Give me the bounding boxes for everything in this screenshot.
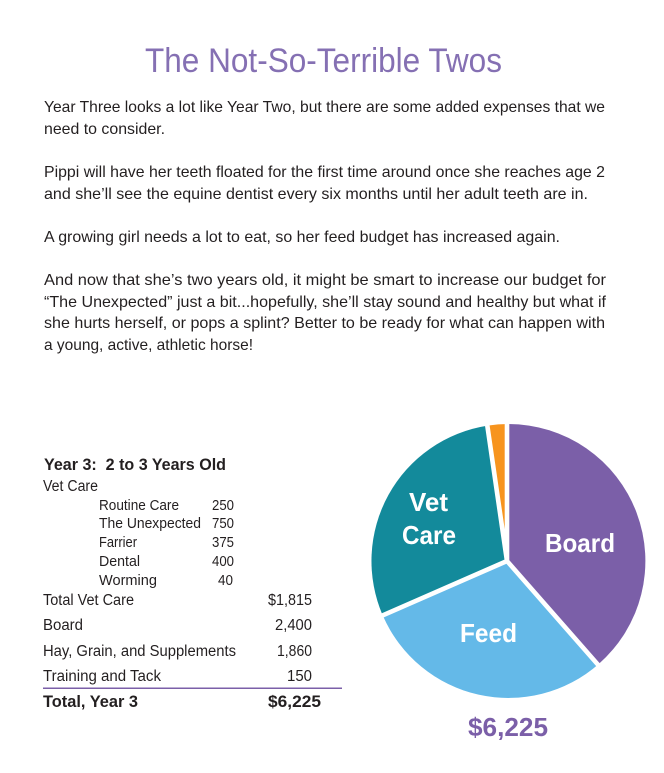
vet care line items (99, 498, 234, 589)
slice: feed (383, 561, 599, 698)
table heading: Year 3: 2 to 3 Years Old (44, 455, 226, 474)
vet care line items: Routine Care (99, 498, 179, 514)
pie chart (371, 420, 645, 698)
pie total: $6,225 (468, 712, 548, 742)
vet care line items: Dental (99, 554, 140, 570)
total row (43, 692, 321, 711)
total row: Total, Year 3 (43, 692, 138, 711)
training and tack row: Training and Tack (43, 668, 161, 685)
label: vet care: Vet (409, 487, 448, 517)
vet care line items: 375 (212, 535, 234, 551)
text block: introduction: Year Three looks a lot like Year Two, but there are some added expenses that we (44, 99, 605, 116)
vet care line items: 750 (212, 516, 234, 532)
vet care line items: Worming (99, 573, 157, 589)
vet care line items: 400 (212, 554, 234, 570)
vet care line items: The Unexpected (99, 516, 201, 532)
vet care line items: 250 (212, 498, 234, 514)
slice: vet care (371, 426, 508, 616)
text block: the unexpected: “The Unexpected” just a bit...hopefully, she’ll stay sound and healthy but what if (44, 294, 607, 311)
board row: Board (43, 617, 83, 634)
label: vet care (402, 487, 456, 550)
total vet care row: $1,815 (268, 592, 312, 609)
total vet care row (43, 592, 312, 609)
text block: the unexpected: a young, active, athletic horse! (44, 337, 253, 354)
text block: introduction (44, 99, 605, 138)
text block: teeth floating (44, 164, 605, 203)
text block: introduction: need to consider. (44, 121, 165, 138)
board row: 2,400 (275, 617, 312, 634)
label: vet care: Care (402, 520, 456, 550)
training and tack row: 150 (287, 668, 312, 685)
text block: the unexpected: And now that she’s two years old, it might be smart to increase our budget for (44, 272, 607, 289)
vet care line items: Farrier (99, 535, 137, 551)
hay, grain and supplements row: 1,860 (277, 643, 312, 660)
vet care subheading: Vet Care (43, 478, 98, 495)
vet care line items: 40 (218, 573, 233, 589)
board row (43, 617, 312, 634)
label: feed: Feed (460, 618, 517, 648)
hay, grain and supplements row: Hay, Grain, and Supplements (43, 643, 236, 660)
text block: teeth floating: Pippi will have her teeth floated for the first time around once she reaches age 2 (44, 164, 605, 181)
slice: training and tack (488, 424, 508, 561)
text block: feed budget: A growing girl needs a lot to eat, so her feed budget has increased again. (44, 229, 560, 246)
budget table (43, 455, 342, 711)
text block: the unexpected: she hurts herself, or pops a splint? Better to be ready for what can happen with (44, 315, 605, 332)
total vet care row: Total Vet Care (43, 592, 134, 609)
text block: the unexpected (44, 272, 607, 354)
slice: board (508, 424, 645, 664)
total row: $6,225 (268, 692, 321, 711)
training and tack row (43, 668, 312, 685)
title: The Not-So-Terrible Twos (145, 42, 502, 80)
text block: teeth floating: and she’ll see the equine dentist every six months until her adult teeth are in. (44, 186, 588, 203)
label: board: Board (545, 528, 615, 558)
